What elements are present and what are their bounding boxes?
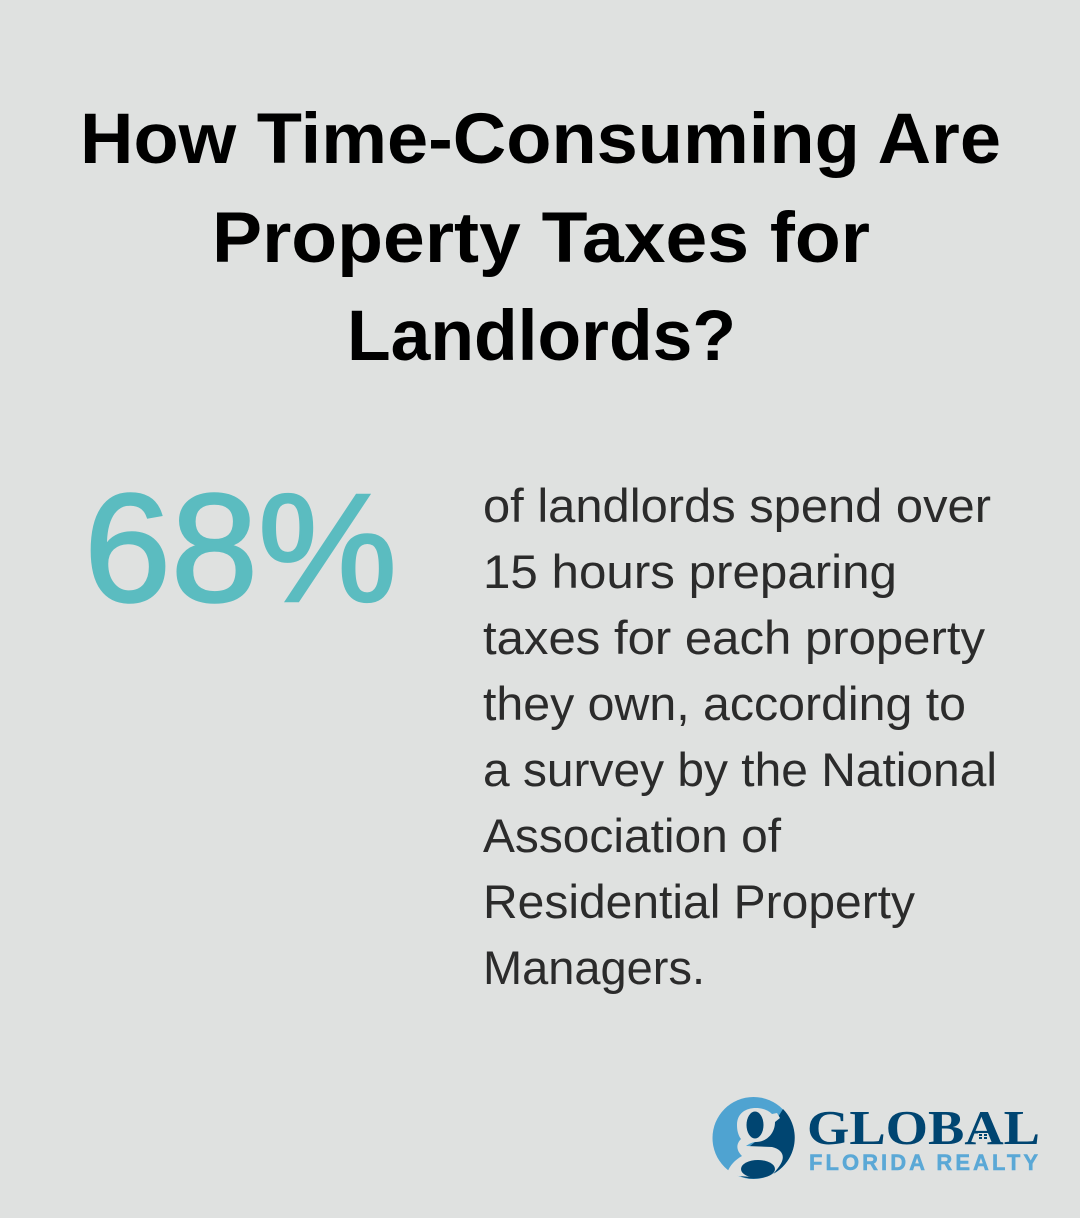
description text: a survey by the National (483, 744, 997, 797)
description text: 15 hours preparing (483, 546, 897, 599)
description text: taxes for each property (483, 612, 985, 665)
title: Property Taxes for (212, 199, 870, 278)
icon: house window (978, 1133, 988, 1140)
description text: Managers. (483, 942, 705, 995)
wordmark: Florida Realty: FLORIDA REALTY (809, 1150, 1038, 1175)
wordmark: GLOBAL: GLOBAL (807, 1100, 1040, 1155)
description text: they own, according to (483, 678, 966, 731)
logo: Global Florida Realty (712, 1097, 1040, 1179)
title: How Time-Consuming Are (80, 100, 1001, 179)
description text (483, 480, 997, 995)
description text: of landlords spend over (483, 480, 991, 533)
description text: Association of (483, 810, 782, 863)
icon: g in circle (712, 1097, 795, 1179)
big statistic: 68% (84, 462, 397, 634)
title: Landlords? (347, 297, 736, 376)
title (80, 100, 1001, 376)
description text: Residential Property (483, 876, 915, 929)
